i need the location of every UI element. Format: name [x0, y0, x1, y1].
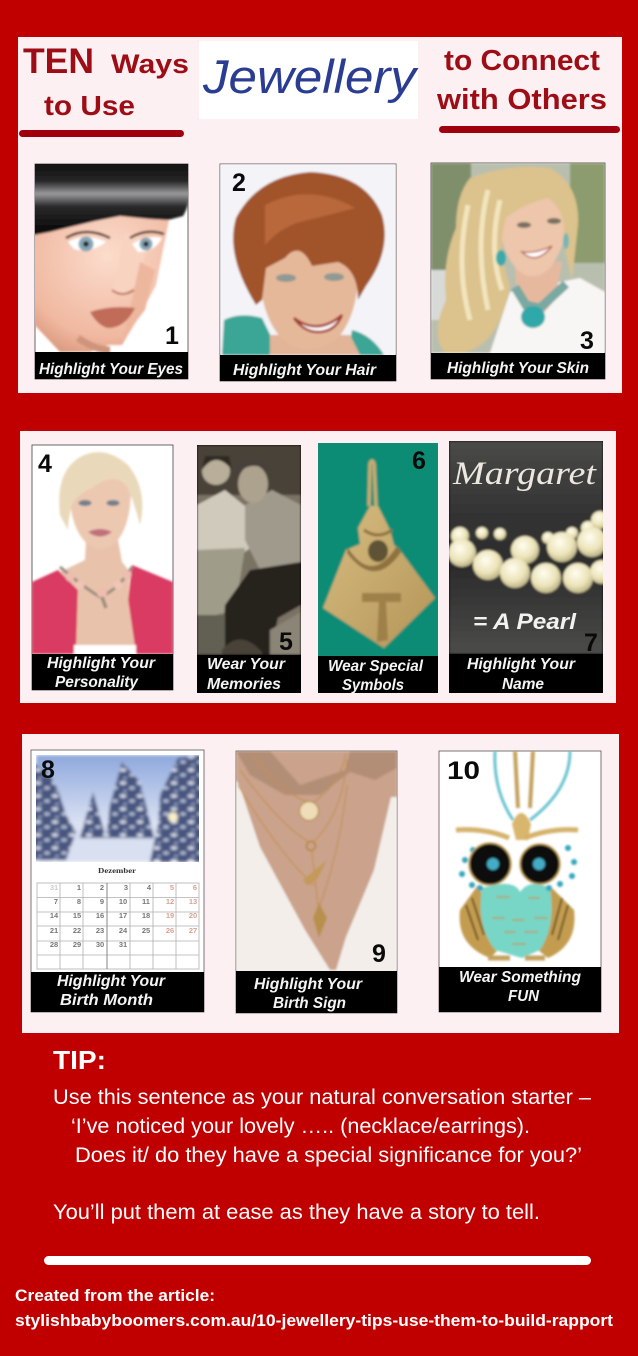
calendar grid: 22: [73, 926, 81, 935]
calendar grid: 2: [100, 883, 104, 892]
logo: Jewellery: Jewellery: [202, 50, 419, 103]
calendar grid: 29: [73, 940, 81, 949]
card 6: wear special symbols: [318, 443, 438, 694]
heading: to Connect with Others: with Others: [436, 84, 607, 116]
heading: TEN Ways to Use: TEN: [23, 42, 94, 81]
caption: Highlight Your Hair: [233, 362, 377, 379]
calendar grid: 17: [119, 911, 127, 920]
calendar grid: 10: [119, 897, 127, 906]
calendar grid: 4: [147, 883, 152, 892]
tip text: ‘I’ve noticed your lovely ….. (necklace/earrings).: [71, 1115, 530, 1138]
caption: Wear Special: [328, 658, 424, 675]
caption: Wear Your: [207, 656, 286, 673]
logo: Jewellery: [199, 41, 419, 119]
calendar grid: 15: [73, 911, 81, 920]
panel: header and first row: [18, 37, 622, 393]
calendar grid: 27: [189, 926, 197, 935]
panel: third row: [22, 734, 619, 1033]
heading: to Connect with Others: to Connect: [444, 45, 600, 77]
caption: [449, 654, 603, 693]
caption: Highlight Your: [254, 976, 363, 993]
calendar grid: 28: [50, 940, 58, 949]
number 10: 10: [447, 757, 480, 785]
calendar grid: 23: [96, 926, 104, 935]
underline: left: [19, 130, 184, 137]
calendar photo: [30, 755, 205, 862]
card 5: wear your memories: [197, 445, 301, 693]
caption: FUN: [508, 988, 540, 1005]
card 1: highlight your eyes: [30, 160, 190, 379]
calendar grid: 19: [166, 911, 174, 920]
source credit: stylishbabyboomers.com.au/10-jewellery-tips-use-them-to-build-rapport: [15, 1311, 613, 1330]
calendar grid: 12: [166, 897, 174, 906]
calendar grid: 5: [170, 883, 174, 892]
card 8: highlight your birth month: [30, 750, 205, 1012]
divider bar: [44, 1256, 591, 1265]
caption: Name: [502, 676, 544, 693]
caption: [439, 967, 601, 1012]
number 9: 9: [372, 940, 386, 968]
panel: second row: [20, 431, 616, 703]
pink flower necklace: [60, 567, 132, 608]
caption: [220, 355, 396, 381]
caption: Birth Sign: [273, 995, 346, 1012]
source credit: Created from the article:: [15, 1286, 215, 1305]
number 4: 4: [38, 450, 52, 478]
caption: [318, 656, 438, 694]
caption: [431, 353, 605, 379]
calendar grid: 1: [77, 883, 81, 892]
calendar grid: 8: [77, 897, 81, 906]
calendar grid: 9: [100, 897, 104, 906]
caption: Wear Something: [459, 969, 582, 986]
calendar grid: 21: [50, 926, 58, 935]
calendar grid: 24: [119, 926, 128, 935]
caption: Memories: [207, 676, 281, 693]
caption: Personality: [55, 674, 139, 691]
caption: Highlight Your: [57, 973, 166, 990]
heading: to Connect with Others: [436, 45, 607, 116]
tip text: Use this sentence as your natural conversation starter –: [53, 1086, 591, 1109]
caption: [197, 655, 301, 693]
calendar grid: 6: [193, 883, 197, 892]
label: = A Pearl: = A Pearl: [473, 609, 577, 634]
heading: TEN Ways to Use: [23, 42, 189, 121]
source credit: [15, 1286, 613, 1330]
caption: Symbols: [342, 677, 404, 694]
card 3: highlight your skin: [431, 163, 605, 379]
calendar grid: 3: [124, 883, 128, 892]
calendar grid: 20: [189, 911, 197, 920]
number 1: 1: [165, 322, 179, 350]
heading: TEN Ways to Use: to Use: [44, 90, 135, 121]
tip heading: TIP:: [53, 1045, 106, 1075]
caption: Highlight Your: [467, 656, 576, 673]
number 6: 6: [412, 447, 426, 475]
caption: Highlight Your Eyes: [39, 361, 183, 378]
calendar grid: 16: [96, 911, 104, 920]
card 2: highlight your hair: [220, 164, 396, 381]
tip text: Does it/ do they have a special significance for you?’: [75, 1144, 582, 1167]
calendar grid: 31: [50, 883, 58, 892]
calendar grid: 30: [96, 940, 104, 949]
calendar grid: 31: [119, 940, 127, 949]
number 5: 5: [279, 628, 293, 656]
caption: [31, 972, 204, 1012]
card 10: wear something fun: [439, 751, 601, 1012]
calendar grid: 26: [166, 926, 174, 935]
calendar month title: Dezember: [98, 866, 137, 875]
caption: Birth Month: [60, 992, 153, 1009]
caption: [32, 654, 173, 691]
card 7: highlight your name: [448, 441, 614, 693]
number 7: 7: [584, 629, 598, 657]
caption: [35, 352, 188, 379]
tip text: [53, 1086, 591, 1224]
calendar grid: 18: [142, 911, 150, 920]
heading: TEN Ways to Use: Ways: [111, 49, 189, 79]
calendar grid: 13: [189, 897, 197, 906]
calendar grid: 7: [54, 897, 58, 906]
calendar grid: [37, 883, 199, 969]
caption: Highlight Your Skin: [447, 360, 589, 377]
number 2: 2: [232, 169, 246, 197]
underline: right: [439, 126, 620, 133]
caption: Highlight Your: [47, 655, 156, 672]
tip text: You’ll put them at ease as they have a story to tell.: [53, 1201, 540, 1224]
caption: [236, 971, 397, 1013]
card 4: highlight your personality: [32, 445, 173, 691]
card 9: highlight your birth sign: [236, 751, 397, 1013]
calendar grid: 11: [142, 897, 150, 906]
calendar grid: 14: [50, 911, 59, 920]
calendar grid: 25: [142, 926, 150, 935]
number 3: 3: [580, 327, 594, 355]
label: Margaret: Margaret: [452, 456, 597, 492]
number 8: 8: [41, 756, 55, 784]
